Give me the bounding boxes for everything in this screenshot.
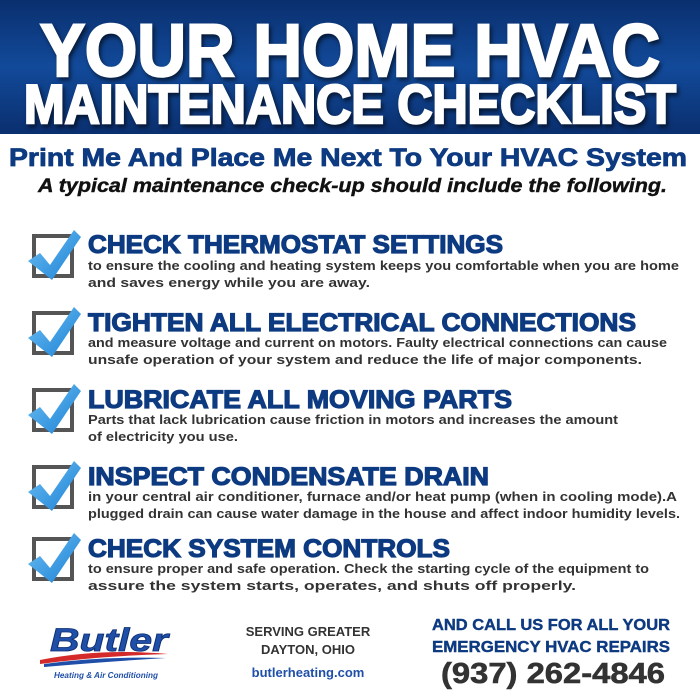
title <box>24 9 676 135</box>
item 1 <box>28 230 679 290</box>
subtitle: Print Me And Place Me Next To Your HVAC System <box>9 144 687 172</box>
item 3: Parts that lack lubrication cause friction in motors and increases the amount <box>88 413 619 427</box>
header band <box>0 0 700 135</box>
logo: Butler <box>40 622 170 680</box>
item 5: to ensure proper and safe operation. Check the starting cycle of the equipment to <box>88 562 649 576</box>
item 1: CHECK THERMOSTAT SETTINGS <box>88 231 503 259</box>
item 4: in your central air conditioner, furnace and/or heat pump (when in cooling mode).A <box>88 490 677 504</box>
item 2: TIGHTEN ALL ELECTRICAL CONNECTIONS <box>88 309 636 337</box>
service area: butlerheating.com <box>252 665 364 680</box>
item 4: INSPECT CONDENSATE DRAIN <box>88 463 489 491</box>
item 1: and saves energy while you are away. <box>88 276 370 290</box>
item 1: to ensure the cooling and heating system keeps you comfortable when you are home <box>88 259 679 273</box>
item 2: and measure voltage and current on motors. Faulty electrical connections can cause <box>88 336 667 350</box>
call to action <box>432 617 670 690</box>
logo: Butler: Butler <box>50 622 170 658</box>
item 3 <box>28 384 619 444</box>
item 3: of electricity you use. <box>88 430 238 444</box>
service area <box>246 624 371 680</box>
item 4 <box>28 461 680 521</box>
item 5: CHECK SYSTEM CONTROLS <box>88 535 450 563</box>
item 5 <box>28 533 649 593</box>
call to action: EMERGENCY HVAC REPAIRS <box>432 639 670 656</box>
item 4: plugged drain can cause water damage in the house and affect indoor humidity levels. <box>88 507 680 521</box>
call to action: AND CALL US FOR ALL YOUR <box>432 617 670 634</box>
logo: Butler: Heating & Air Conditioning <box>54 670 159 680</box>
item 2 <box>28 307 667 367</box>
service area: DAYTON, OHIO <box>261 642 355 657</box>
service area: SERVING GREATER <box>246 624 371 639</box>
phone: (937) 262-4846 <box>441 658 665 690</box>
item 5: assure the system starts, operates, and shuts off properly. <box>88 579 576 593</box>
item 2: unsafe operation of your system and reduce the life of major components. <box>88 353 642 367</box>
item 3: LUBRICATE ALL MOVING PARTS <box>88 386 512 414</box>
intro text: A typical maintenance check-up should include the following. <box>37 176 667 197</box>
